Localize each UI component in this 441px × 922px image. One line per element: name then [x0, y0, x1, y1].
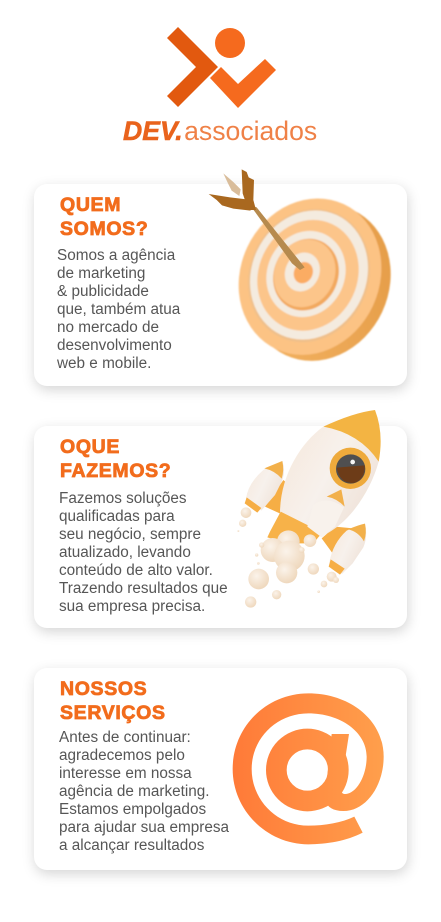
text block: o que fazemos: atualizado, levando: [59, 544, 191, 561]
text block: nossos serviços: [59, 729, 229, 854]
heading: o que fazemos: [60, 436, 171, 482]
panel: quem somos: [34, 184, 407, 386]
heading: nossos serviços: SERVIÇOS: [60, 702, 166, 724]
panel: o que fazemos: [34, 426, 407, 628]
heading: o que fazemos: OQUE: [60, 436, 120, 458]
fin: [307, 501, 344, 537]
text block: o que fazemos: qualificadas para: [59, 508, 175, 525]
icon: logo check: [210, 59, 276, 108]
text block: nossos serviços: interesse em nossa: [59, 765, 192, 782]
text block: nossos serviços: agradecemos pelo: [59, 747, 185, 764]
icon: logo chevron: [167, 27, 218, 107]
rocket body: [280, 427, 379, 537]
heading: quem somos: SOMOS?: [60, 218, 148, 240]
text block: nossos serviços: a alcançar resultados: [59, 837, 204, 854]
text block: o que fazemos: [59, 490, 228, 615]
text block: o que fazemos: sua empresa precisa.: [59, 598, 205, 615]
text block: nossos serviços: para ajudar sua empresa: [59, 819, 229, 836]
text block: quem somos: web e mobile.: [57, 355, 151, 372]
text block: o que fazemos: conteúdo de alto valor.: [59, 562, 213, 579]
rocket nose: [323, 410, 381, 462]
text block: o que fazemos: seu negócio, sempre: [59, 526, 201, 543]
heading: quem somos: [60, 194, 148, 240]
right booster: [322, 527, 353, 557]
text block: o que fazemos: Trazendo resultados que: [59, 580, 228, 597]
text block: quem somos: desenvolvimento: [57, 337, 172, 354]
text block: nossos serviços: Antes de continuar:: [59, 729, 191, 746]
text block: o que fazemos: Fazemos soluções: [59, 490, 187, 507]
text block: quem somos: que, também atua: [57, 301, 180, 318]
icon: logo circle: [215, 28, 245, 58]
left booster: [265, 480, 295, 515]
heading: nossos serviços: [60, 678, 166, 724]
porthole: [330, 448, 371, 489]
text block: quem somos: Somos a agência: [57, 247, 175, 264]
text block: quem somos: [57, 247, 180, 372]
text block: quem somos: no mercado de: [57, 319, 159, 336]
heading: quem somos: QUEM: [60, 194, 121, 216]
text block: nossos serviços: Estamos empolgados: [59, 801, 206, 818]
smoke clouds: [237, 507, 339, 608]
heading: o que fazemos: FAZEMOS?: [60, 460, 171, 482]
heading: nossos serviços: NOSSOS: [60, 678, 147, 700]
arrow: [209, 169, 305, 270]
logo: [123, 27, 317, 146]
panel: nossos serviços: [34, 668, 407, 870]
text block: quem somos: & publicidade: [57, 283, 149, 300]
text block: nossos serviços: agência de marketing.: [59, 783, 210, 800]
text block: quem somos: de marketing: [57, 265, 145, 282]
logo wordmark: DEV.associados: [123, 116, 317, 146]
